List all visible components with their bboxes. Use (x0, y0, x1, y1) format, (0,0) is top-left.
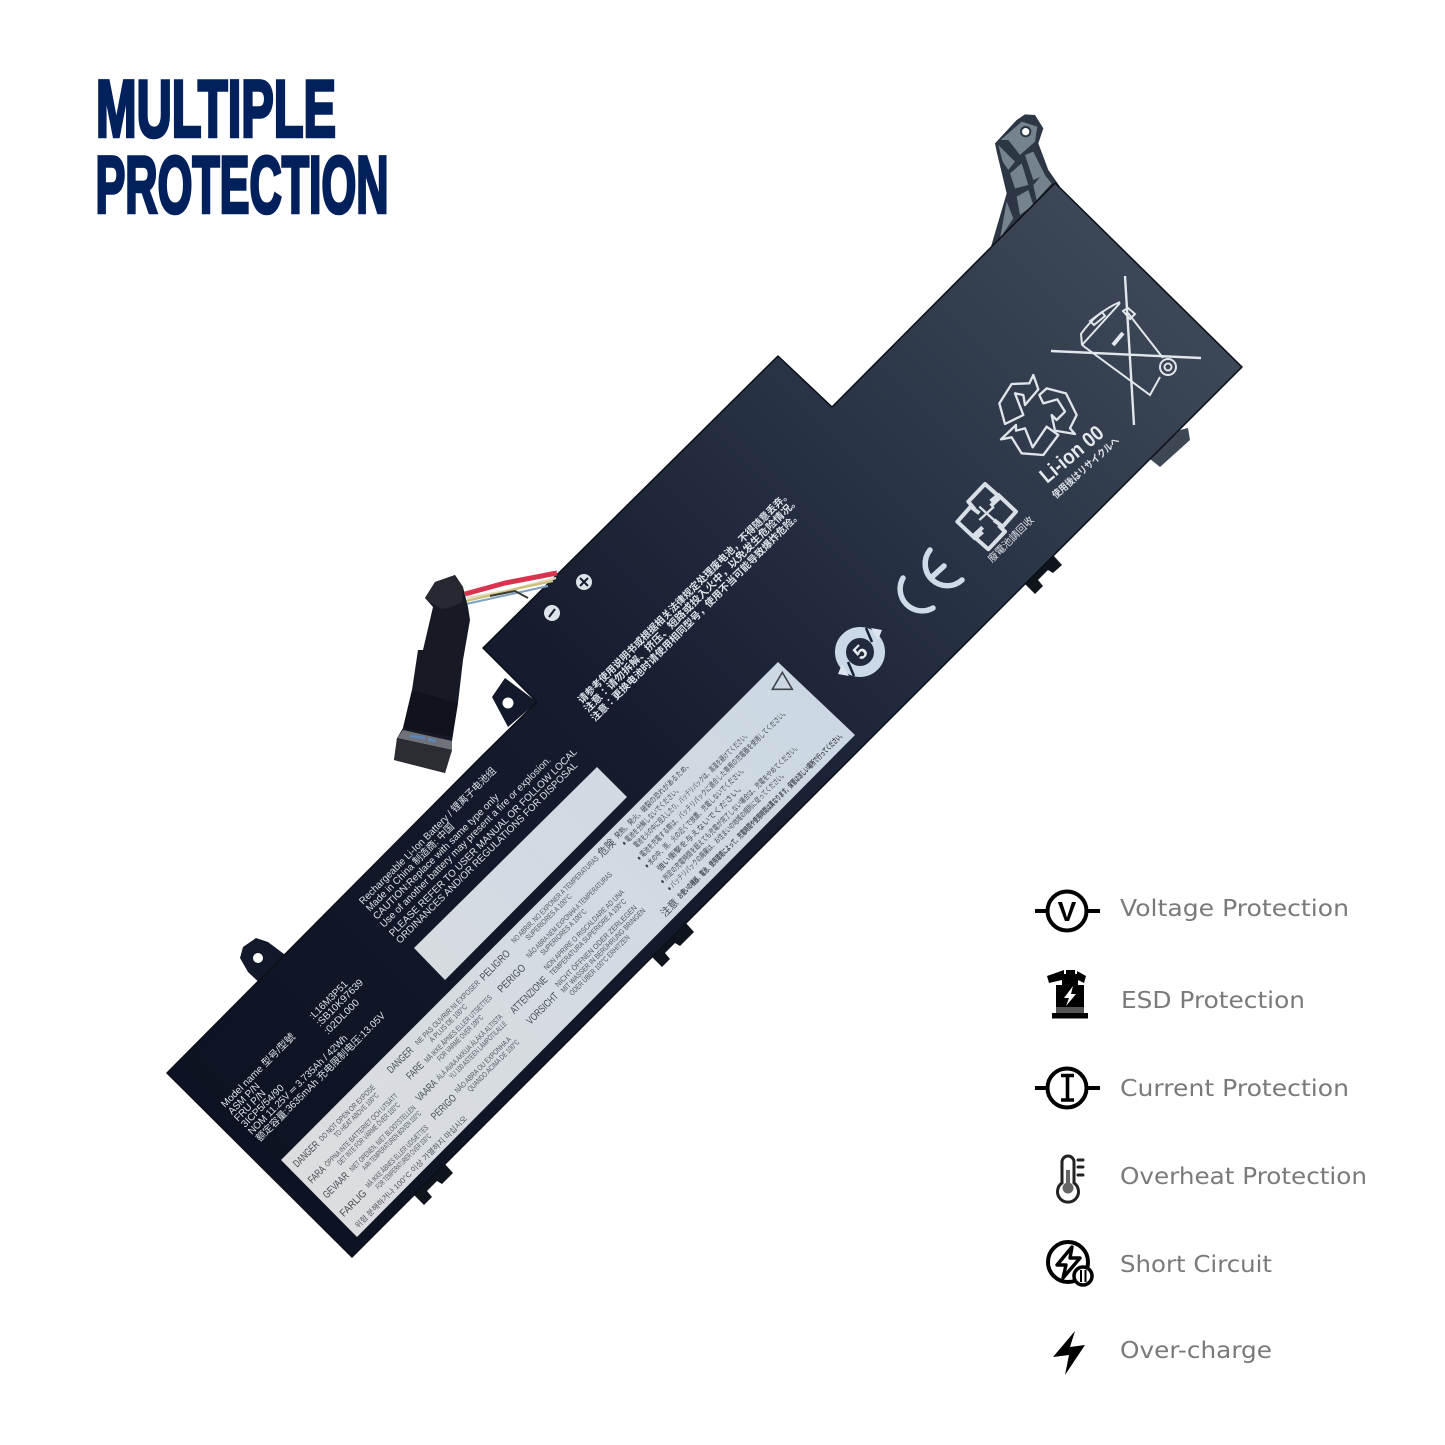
warning label text: PELIGRO (478, 948, 513, 983)
icon: thermometer (1058, 1156, 1083, 1202)
warning label text: DANGER (385, 1045, 416, 1076)
warning label text: ● 水の中、雨、火の近くで放置、充電しないでください。 (642, 764, 748, 870)
title (96, 64, 388, 230)
warning label text: SUPERIORES A 100°C (524, 892, 574, 942)
title: MULTIPLE (96, 64, 336, 154)
warning label text: 強い衝撃を与えないでください。 (654, 781, 746, 873)
label: short circuit: Short Circuit (1120, 1252, 1272, 1278)
warning label text: PERIGO (495, 962, 528, 995)
model text block: FRU P/N (232, 1088, 268, 1124)
protection feature list (1035, 892, 1367, 1375)
warning label text: FARA (306, 1164, 328, 1186)
plastic bracket at top of battery (990, 114, 1060, 250)
rechargeable battery caution text: PLEASE REFER TO USER MANUAL OR FOLLOW LOCAL (387, 746, 580, 939)
warning label text: 電池を火の中に投入したり、バッテリパックは、高温を避けてください。 (631, 729, 751, 850)
icon: 5-year recycling mark (838, 628, 882, 676)
chinese notice text: 请参考使用说明书或根据相关法律规定处理废电池，不得随意丢弃。 (575, 488, 793, 706)
item: ESD protection (1047, 970, 1305, 1018)
terminal markers (544, 574, 592, 621)
li-ion marking: 使用後はリサイクルへ (1049, 434, 1122, 501)
warning label text: FOR VARME OVER 100°C (435, 1013, 486, 1063)
warning triangle (772, 672, 792, 689)
item: current protection (1035, 1068, 1349, 1108)
battery body (167, 183, 1242, 1257)
warning label text: DO NOT OPEN OR EXPOSE (317, 1083, 377, 1143)
recycling caption: 廢電池請回收 (985, 514, 1037, 565)
icon: current (1035, 1068, 1100, 1108)
warning label text: NE PAS OUVRIR NI EXPOSER (413, 978, 482, 1047)
rechargeable battery caution text: Rechargeable Li-Ion Battery / 锂离子电池组 (356, 764, 499, 907)
model text block: NOM 11.25V ═ 3.735Ah / 42Wh (246, 1033, 350, 1137)
warning label text: MÅ IKKE ÅBNES ELLER UDSÆTTES (364, 1123, 430, 1190)
item: short circuit (1048, 1242, 1272, 1285)
warning label text: NIET OPENEN, NIET BLOOTSTELLEN (347, 1103, 417, 1173)
item: over-charge (1053, 1331, 1272, 1375)
model text block: 3ICP5/54/90 (239, 1082, 287, 1130)
warning label text: MÅ IKKE ÅPNES ELLER UTSETTES (422, 993, 494, 1065)
warning label text: TEMPERATURA SUPERIORE A 100°C (548, 897, 628, 978)
title: PROTECTION (96, 140, 388, 230)
warning label text: À PLUS DE 100°C (427, 1002, 469, 1044)
model text block: :L16M3P51 (307, 979, 351, 1022)
warning label text: 危険 (596, 837, 619, 859)
warning label text: DET INTE FÖR VÄRME ÖVER 100°C (335, 1100, 402, 1167)
icon: ESD (1047, 970, 1088, 1018)
cable and connector (394, 573, 557, 773)
battery illustration (167, 114, 1242, 1257)
warning label text: FARLIG (338, 1188, 369, 1219)
model text block: ASM P/N (226, 1081, 262, 1117)
large warning label (281, 662, 855, 1237)
warning label text: ÄLÄ AVAA AKKUA ÄLÄKÄ ALTISTA (434, 1012, 505, 1082)
warning label text: FARE (404, 1060, 427, 1082)
icon: collection recycling symbol (957, 484, 1016, 549)
warning label text: ● バッテリパックの廃棄は、お住まいの地域の規則に従ってください。 (664, 769, 788, 893)
tab holes (253, 698, 514, 963)
warning label text: FOR TEMPERATURER OVER 100°C (374, 1132, 433, 1191)
model text block: Model name 型号/型號 (218, 1030, 298, 1110)
warning label text (286, 662, 855, 1231)
warning label text: NÃO ABRA NEM EXPONHA A TEMPERATURAS (524, 870, 614, 960)
warning label text: YLI 100 ASTEEN LÄMPÖTILALLE (447, 1019, 509, 1081)
warning label text: お使いの機器、電池、使用環境によって、充電時間や使用時間は異なります。保管は涼しい場所で行ってください。 (675, 729, 846, 900)
li-ion marking: Li-ion 00 (1035, 421, 1108, 488)
warning label text: 発熱、発火、破裂の恐れがあるため、 (612, 759, 693, 840)
label: over-charge: Over-charge (1120, 1338, 1272, 1364)
warning label text: NON APRIRE O RISCALDARE AD UNA (542, 887, 627, 972)
warning label text: NÃO ABRA OU EXPONHA A (453, 1034, 513, 1095)
item: overheat protection (1058, 1156, 1367, 1202)
rechargeable battery caution text: CAUTION:Replace with same type only (371, 792, 501, 922)
warning label text: SUPERIORES A 100°C (538, 907, 589, 957)
warning label text: ● 所定の充電時間を超えても充電が完了しない場合は、充電をやめてください。 (657, 741, 801, 886)
icon: CE mark (900, 550, 962, 611)
warning label text: VORSICHT (524, 990, 561, 1027)
icon: 5-year recycling mark: 5 (849, 641, 872, 664)
item: voltage protection (1035, 892, 1349, 930)
blank label (414, 767, 627, 980)
warning label text: MIT WASSER IN BERÜHRUNG BRINGEN (559, 906, 647, 995)
icon: recycling arrows (999, 375, 1077, 455)
warning label text: 위험 분해하거나 100°C 이상 가열하지 마십시오 (352, 1113, 469, 1230)
label: ESD protection: ESD Protection (1121, 988, 1305, 1014)
model text block (218, 977, 388, 1144)
chinese notice text: 注意：更换电池时请使用相同型号，使用不当可能导致爆炸危险。 (588, 508, 804, 724)
warning label text: NICHT ÖFFNEN ODER ZERLEGEN (553, 903, 639, 989)
warning label text: VAARA (413, 1077, 440, 1104)
icon: voltage (1035, 892, 1100, 930)
warning label text: PERIGO (429, 1092, 459, 1123)
rechargeable battery caution text: Use of another battery may present a fire or explosion. (378, 755, 554, 930)
icon: crossed-out wheelie bin (1051, 276, 1201, 425)
label: current protection: Current Protection (1120, 1076, 1349, 1102)
model text block: 额定容量:3635mAh 充电限制电压:13.05V (253, 1009, 388, 1144)
side clips (414, 428, 1190, 1205)
warning label text: ÖPPNA INTE BATTERIET OCH UTSÄTT (323, 1091, 400, 1168)
icon: short circuit (1048, 1242, 1092, 1285)
warning label text: 注意 (658, 896, 682, 920)
warning label text: TO HEAT ABOVE 100°C (332, 1090, 381, 1139)
label: voltage protection: Voltage Protection (1120, 896, 1349, 922)
warning label text: NO ABRIR, NO EXPONER A TEMPERATURAS (509, 854, 601, 945)
rechargeable battery caution text: Made in China 制造商: 中国 (363, 820, 457, 914)
warning label text: QUANDO ACIMA DE 100°C (466, 1037, 522, 1094)
model text block: :02DL000 (322, 997, 362, 1037)
rechargeable battery caution text: ORDINANCES AND/OR REGULATIONS FOR DISPOSAL (394, 760, 581, 946)
warning label text: AAN TEMPERATUREN BOVEN 100°C (360, 1109, 423, 1172)
icon: voltage: V (1058, 896, 1077, 927)
model text block: :SB10K97639 (314, 977, 366, 1029)
label: overheat protection: Overheat Protection (1120, 1164, 1367, 1190)
warning label text: ● 電池を分解しないでください。 (619, 784, 683, 847)
warning label text: GEVAAR (321, 1170, 352, 1201)
mounting tabs (240, 678, 537, 987)
warning label text: ATTENZIONE (508, 974, 550, 1016)
warning label text: ● 電池を充電する際は、バッテリパックに適合した専用の充電器を使用してください。 (634, 707, 789, 862)
chinese notice text: 注意：请勿拆解、挤压、短路或投入火中，以免发生危险情况。 (581, 494, 802, 715)
icon: lightning bolt (1053, 1331, 1085, 1375)
warning label text: ODER ÜBER 100°C ERHITZEN (567, 933, 632, 997)
warning label text: DANGER (291, 1139, 322, 1170)
